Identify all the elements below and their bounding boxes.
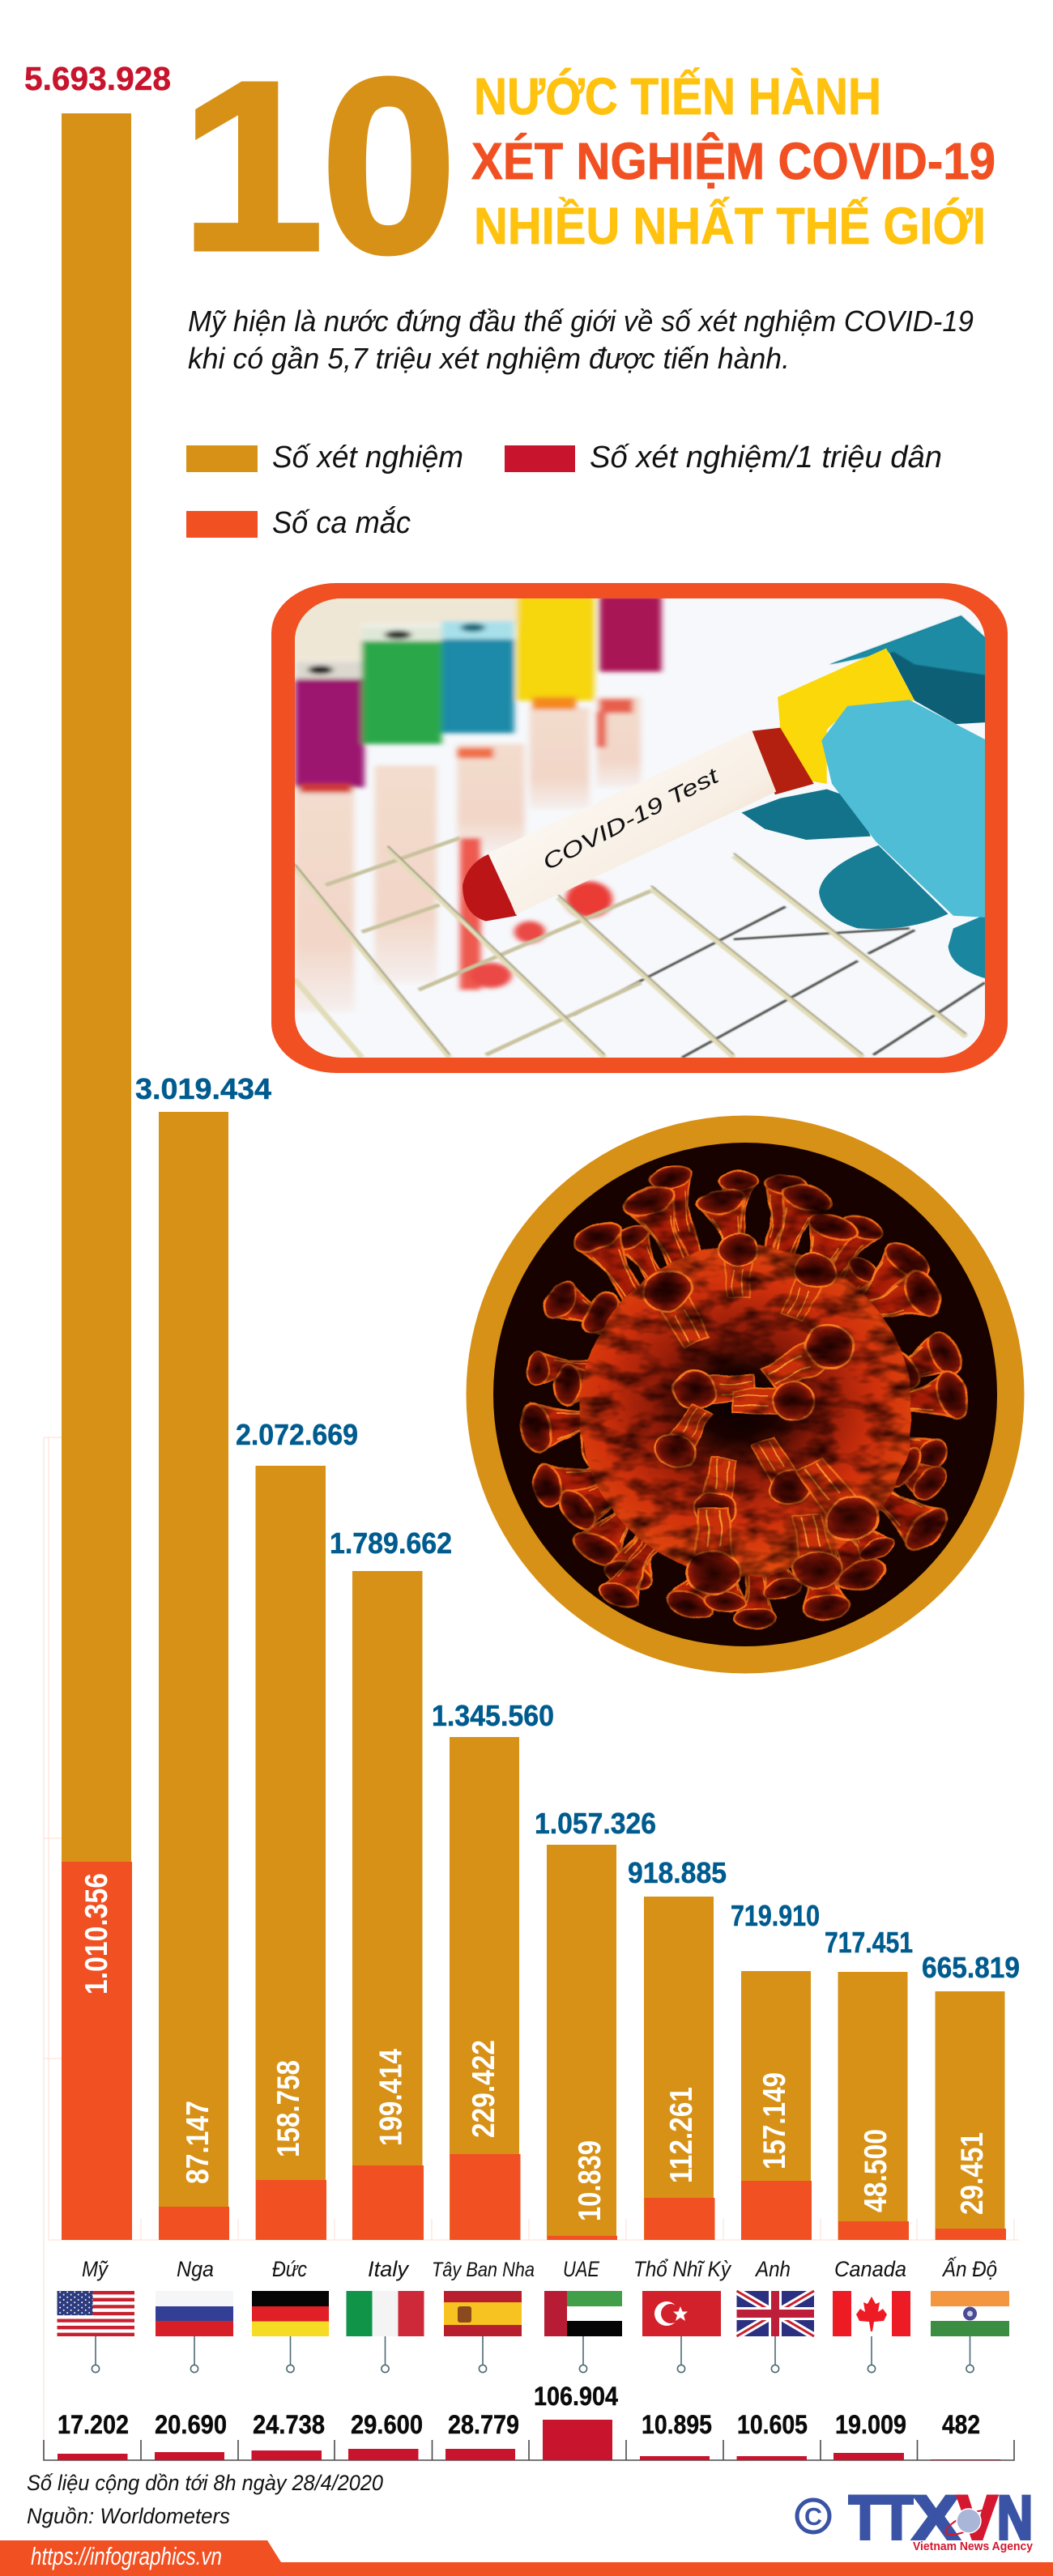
title number 10: 0	[321, 27, 457, 305]
legend: cases: Số ca mắc	[272, 505, 411, 540]
flag: UAE	[544, 2291, 622, 2336]
bar: Canada: 48.500	[859, 2129, 893, 2212]
bar: Russia: 87.147	[181, 2101, 215, 2184]
bar: Italy	[352, 1571, 424, 2240]
country names	[82, 2256, 997, 2281]
legend: tests per million: Số xét nghiệm/1 triệu dân	[590, 441, 942, 475]
footnote and source	[27, 2471, 383, 2528]
title text: NƯỚC TIẾN HÀNH	[474, 67, 881, 126]
test count labels: 717.451	[825, 1926, 913, 1959]
logo: TTXVN: V	[957, 2484, 997, 2553]
cap	[778, 648, 914, 784]
bar: India	[935, 1991, 1006, 2240]
per-million values: 17.202	[58, 2410, 129, 2439]
legend: cases	[186, 505, 411, 540]
flag: Canada	[833, 2291, 910, 2336]
country names: Canada	[834, 2257, 906, 2281]
bar: Italy: 199.414	[374, 2049, 408, 2146]
per-million values: 19.009	[835, 2410, 906, 2439]
per-million values: 10.605	[737, 2410, 808, 2439]
country names: UAE	[563, 2257, 600, 2281]
bar: Canada	[838, 1972, 909, 2240]
title text: NHIỀU NHẤT THẾ GIỚI	[474, 197, 986, 255]
test count labels: 3.019.434	[135, 1072, 271, 1105]
chart guide lines	[44, 1437, 1019, 2440]
per-million values: 28.779	[448, 2410, 519, 2439]
bar: Russia	[159, 1112, 229, 2240]
per-million values: 29.600	[351, 2410, 423, 2439]
footnote and source: Số liệu cộng dồn tới 8h ngày 28/4/2020	[27, 2471, 383, 2495]
logo: TTXVN: Vietnam News Agency	[913, 2540, 1034, 2553]
test count labels: 1.789.662	[330, 1526, 452, 1560]
country names: Italy	[368, 2257, 410, 2281]
rack	[295, 838, 985, 1058]
test count labels: 1.345.560	[432, 1699, 554, 1732]
bar: UK: 157.149	[757, 2072, 792, 2169]
bar: Spain	[450, 1737, 520, 2240]
legend	[186, 441, 942, 540]
title number 10: 1	[180, 32, 324, 301]
legend: tests	[186, 441, 463, 475]
intro paragraph: Mỹ hiện là nước đứng đầu thế giới về số xét nghiệm COVID-19	[188, 304, 974, 338]
country names: Ấn Độ	[941, 2256, 997, 2281]
country names: Anh	[754, 2257, 791, 2281]
intro paragraph: khi có gần 5,7 triệu xét nghiệm được tiến hành.	[188, 342, 790, 375]
bar chart: tests per million	[44, 2420, 1014, 2460]
bar: India: 29.451	[955, 2132, 990, 2215]
intro paragraph	[188, 304, 974, 375]
virus illustration	[467, 1116, 1024, 1673]
tube label: COVID-19 Test	[539, 763, 723, 875]
country names: Đức	[272, 2257, 307, 2281]
country names: Thổ Nhĩ Kỳ	[633, 2257, 731, 2281]
per-million values: 482	[942, 2410, 980, 2439]
test count labels	[24, 60, 1020, 1984]
per-million values	[58, 2382, 980, 2439]
test count labels: 719.910	[731, 1899, 820, 1932]
test count labels: 1.057.326	[535, 1807, 656, 1840]
flag: India	[931, 2291, 1009, 2336]
bar: USA	[62, 113, 132, 2240]
title text	[471, 67, 995, 255]
bar: UAE: 10.839	[573, 2140, 608, 2221]
bar: USA: 1.010.356	[79, 1873, 114, 1995]
flag: Russia	[156, 2291, 233, 2336]
logo: TTXVN: X	[913, 2484, 959, 2553]
flag: UK	[737, 2291, 814, 2336]
logo: TTXVN	[797, 2484, 1034, 2553]
bar chart: tests and cases	[62, 113, 1006, 2240]
per-million values: 106.904	[534, 2382, 618, 2411]
flag: USA	[57, 2291, 134, 2336]
logo: TTXVN: N	[997, 2484, 1033, 2553]
title text: XÉT NGHIỆM COVID-19	[471, 131, 995, 190]
test count labels: 2.072.669	[236, 1418, 358, 1451]
footer band	[0, 2540, 1053, 2576]
country names: Nga	[177, 2257, 214, 2281]
bar: UK	[741, 1971, 812, 2240]
bar: UAE	[547, 1845, 617, 2240]
footer band: https://infographics.vn	[31, 2542, 222, 2570]
flag: Spain	[444, 2291, 522, 2336]
country names: Mỹ	[82, 2257, 109, 2281]
title number 10	[180, 27, 457, 305]
test count labels: 918.885	[628, 1856, 727, 1889]
logo: TTXVN: T	[849, 2484, 881, 2553]
flag connector pins	[92, 2336, 974, 2373]
bar: Turkey	[644, 1897, 714, 2240]
per-million values: 20.690	[155, 2410, 227, 2439]
footnote and source: Nguồn: Worldometers	[27, 2504, 230, 2528]
photo: COVID-19 test tube	[271, 583, 1008, 1073]
flag: Germany	[252, 2291, 329, 2336]
tube	[490, 730, 776, 914]
logo: TTXVN: T	[880, 2484, 913, 2553]
bar: Germany: 158.758	[271, 2060, 306, 2157]
main finger	[821, 700, 987, 918]
country names: Tây Ban Nha	[432, 2259, 535, 2281]
legend: tests: Số xét nghiệm	[272, 441, 463, 475]
flag: Turkey	[642, 2291, 721, 2336]
bar: Germany	[256, 1466, 326, 2240]
test count labels: 5.693.928	[24, 60, 171, 97]
bar: Spain: 229.422	[467, 2040, 501, 2138]
blood ends	[749, 728, 814, 794]
bar: Turkey: 112.261	[664, 2087, 699, 2183]
test count labels: 665.819	[922, 1951, 1020, 1984]
per-million values: 24.738	[253, 2410, 325, 2439]
per-million values: 10.895	[642, 2410, 712, 2439]
logo: TTXVN: C	[804, 2502, 822, 2531]
flag: Italy	[347, 2291, 424, 2336]
glove back	[829, 615, 987, 724]
